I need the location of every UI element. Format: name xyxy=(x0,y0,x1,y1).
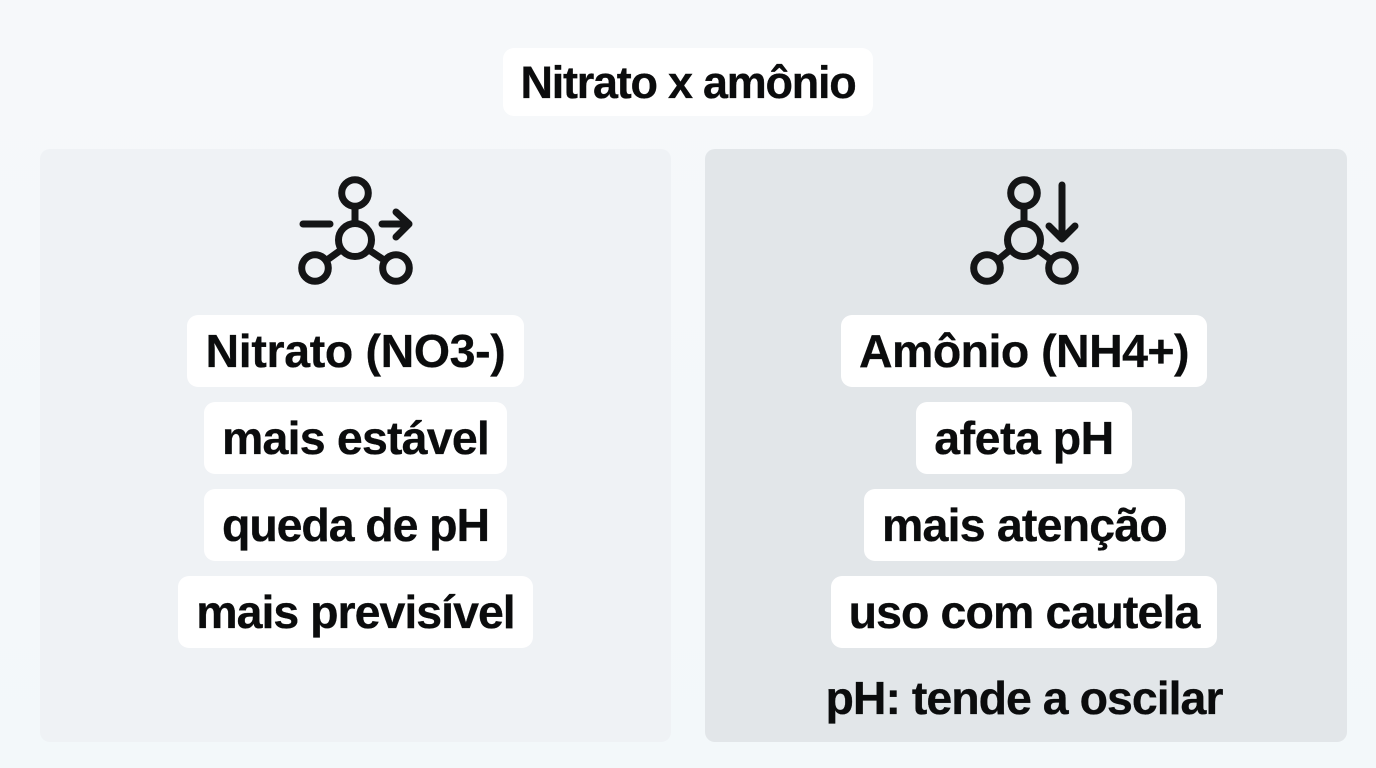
label: Nitrato (NO3-): Nitrato (NO3-) xyxy=(206,325,505,377)
label: mais previsível xyxy=(178,576,533,648)
label: mais estável: mais estável xyxy=(222,412,489,464)
icon: ammonium molecule with down arrow xyxy=(970,176,1079,285)
icon: nitrate molecule with right arrow xyxy=(298,176,413,285)
title: Nitrato x amônio xyxy=(520,57,856,108)
panel: amônio xyxy=(705,149,1347,742)
label: mais atenção xyxy=(864,489,1185,561)
label: uso com cautela: uso com cautela xyxy=(849,586,1199,638)
panel: nitrato xyxy=(40,149,671,742)
label: mais atenção: mais atenção xyxy=(882,499,1167,551)
label: mais previsível: mais previsível xyxy=(196,586,515,638)
label: uso com cautela xyxy=(831,576,1217,648)
label: queda de pH xyxy=(204,489,507,561)
label: Nitrato (NO3-) xyxy=(187,315,524,387)
label: afeta pH xyxy=(916,402,1132,474)
title xyxy=(503,48,873,116)
label: afeta pH: afeta pH xyxy=(934,412,1114,464)
label: Amônio (NH4+) xyxy=(841,315,1207,387)
label: mais estável xyxy=(204,402,507,474)
label: Amônio (NH4+): Amônio (NH4+) xyxy=(859,325,1189,377)
text: pH tende a oscilar: pH: tende a oscilar xyxy=(825,672,1223,724)
label: queda de pH: queda de pH xyxy=(222,499,489,551)
